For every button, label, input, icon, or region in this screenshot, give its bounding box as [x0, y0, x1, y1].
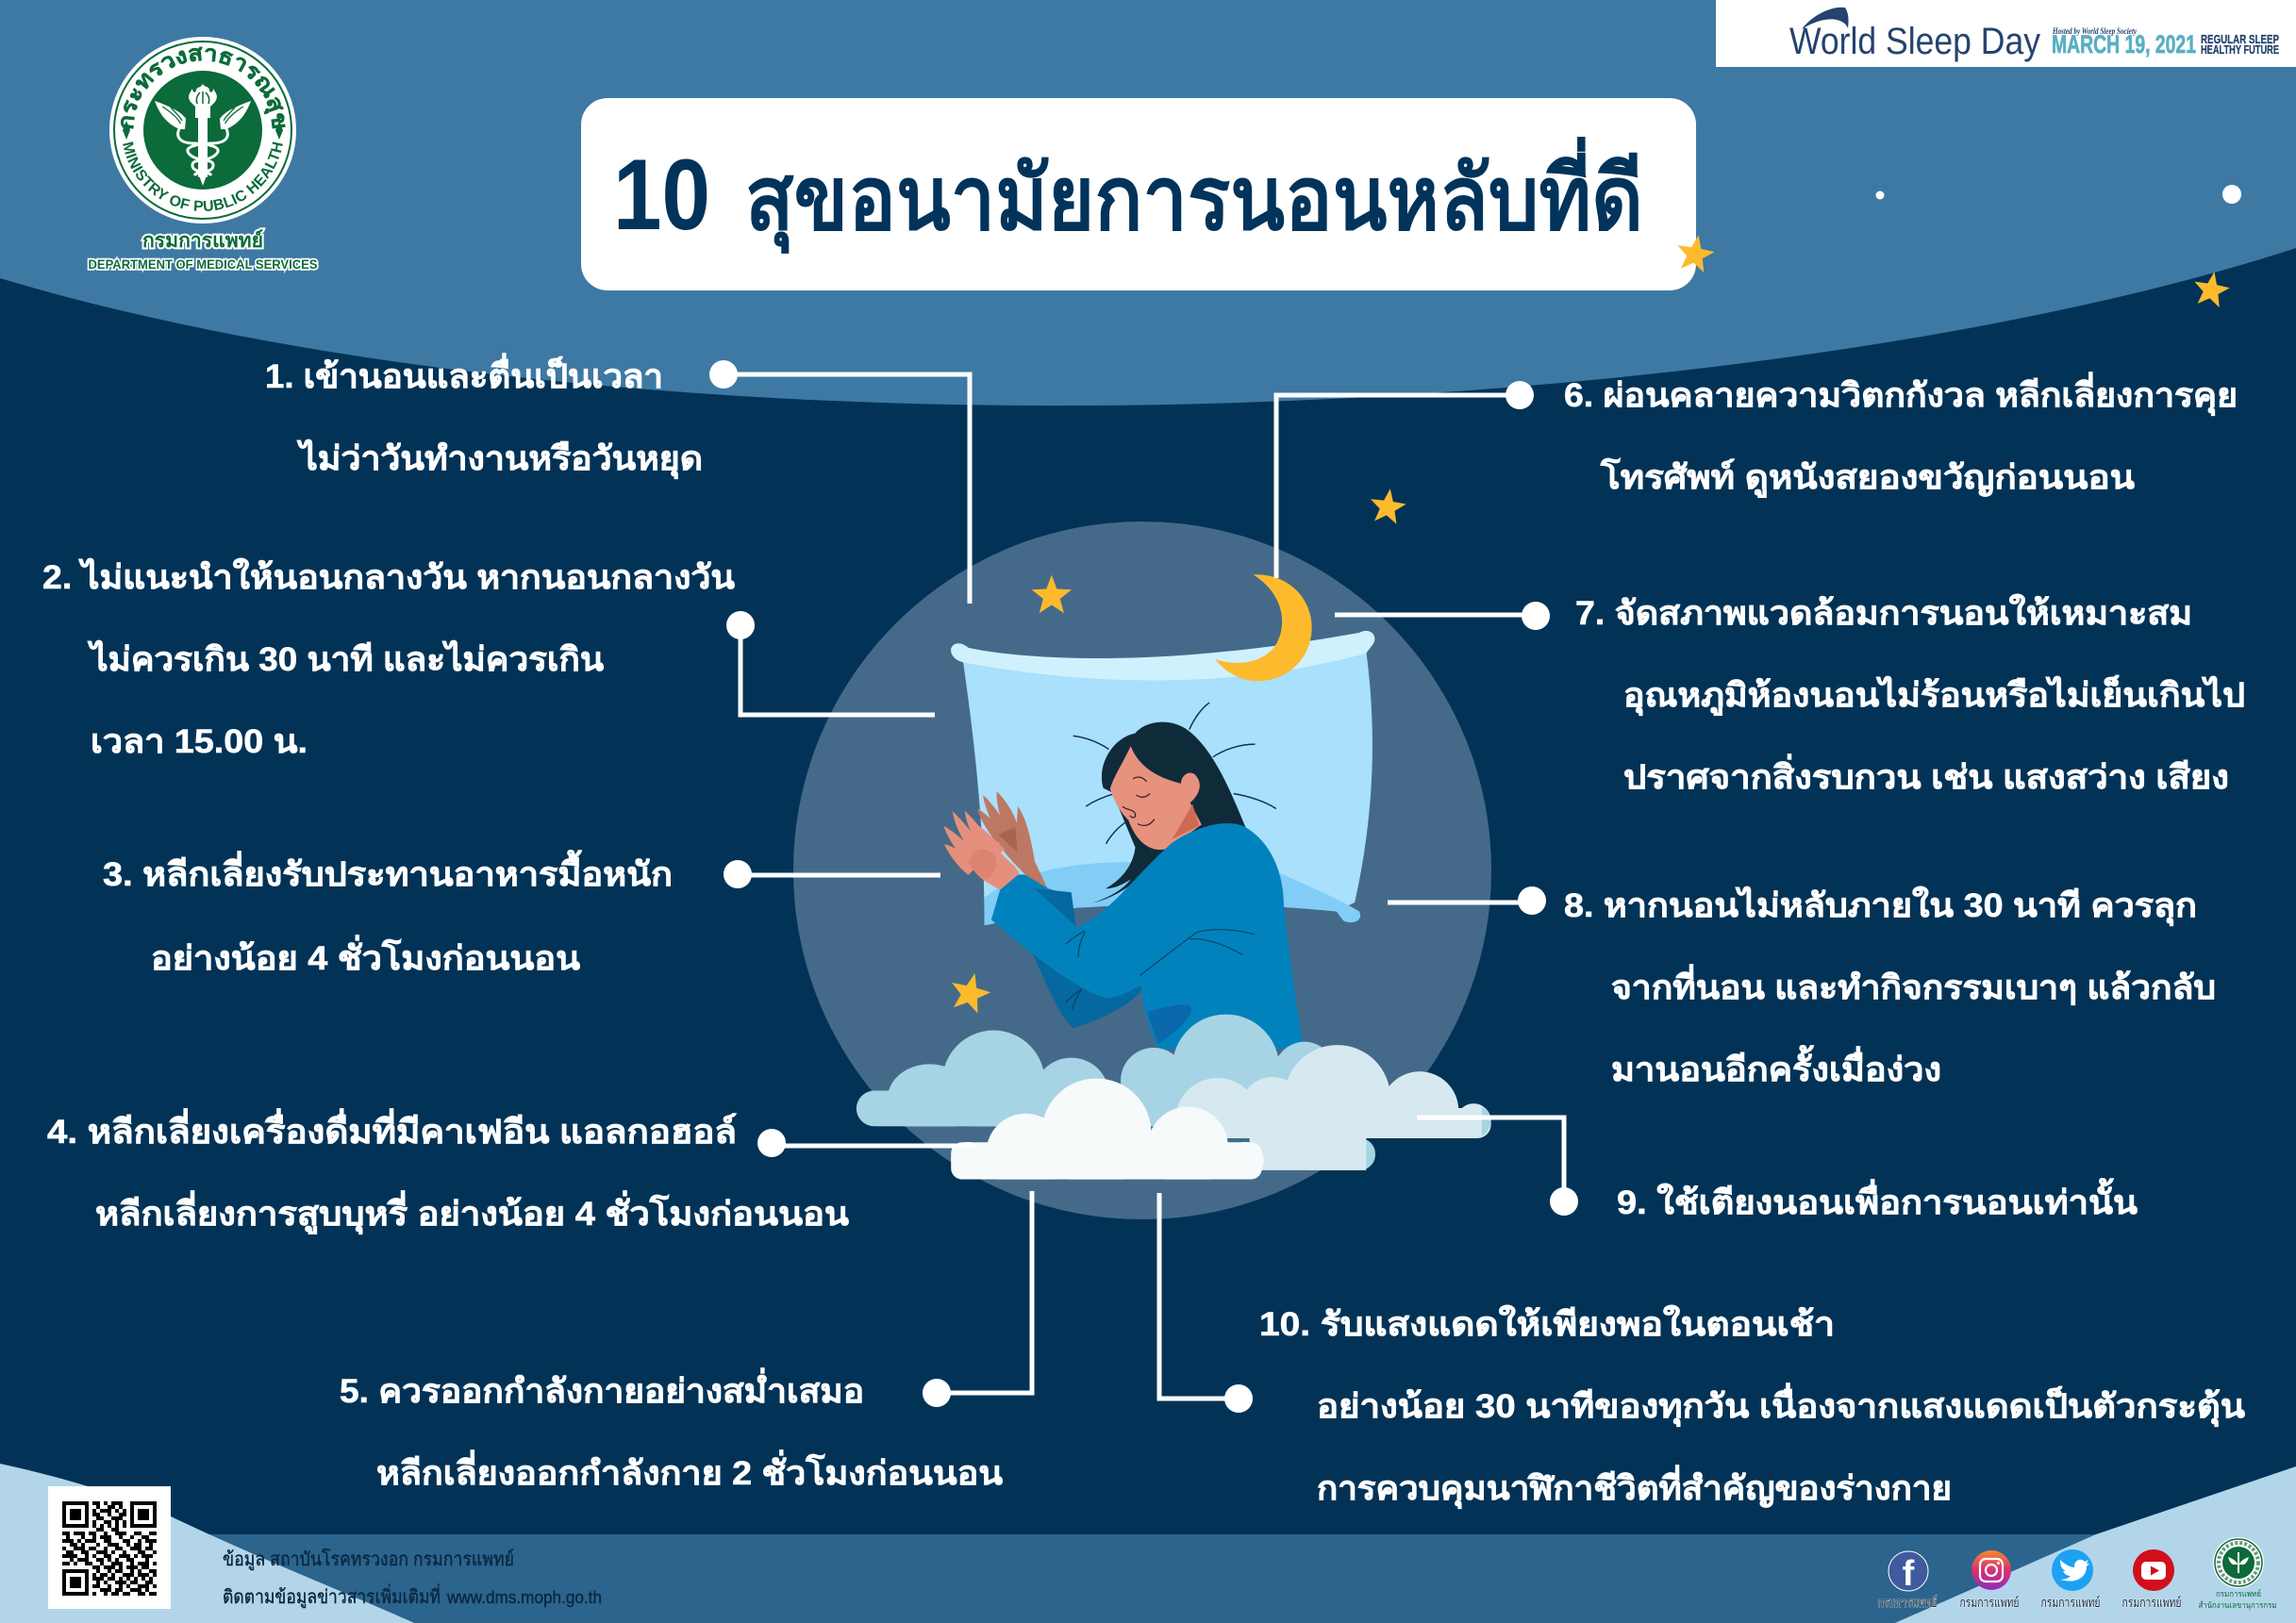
cloud back left [857, 1015, 1337, 1134]
icon: twitter [2052, 1549, 2093, 1591]
host line: Hosted by World Sleep Society [2052, 26, 2138, 36]
star upper [1032, 575, 1072, 613]
item 5: หลีกเลี่ยงออกกำลังกาย 2 ชั่วโมงก่อนนอน [376, 1449, 1003, 1492]
front hand [943, 811, 1020, 889]
item 7: อุณหภูมิห้องนอนไม่ร้อนหรือไม่เย็นเกินไป [1623, 674, 2245, 716]
item 2: 2. ไม่แนะนำให้นอนกลางวัน หากนอนกลางวัน [42, 557, 735, 596]
connector 5 [923, 1191, 1032, 1407]
central circle [793, 522, 1491, 1219]
connector 1 [709, 360, 970, 604]
item 8: จากที่นอน และทำกิจกรรมเบาๆ แล้วกลับ [1611, 964, 2216, 1006]
item 5 [340, 1367, 1003, 1492]
item 10: อย่างน้อย 30 นาทีของทุกวัน เนื่องจากแสงแดดเป็นตัวกระตุ้น [1317, 1383, 2245, 1427]
item 7: ปราศจากสิ่งรบกวน เช่น แสงสว่าง เสียง [1623, 754, 2229, 796]
connector 8 [1388, 886, 1546, 915]
item 4: 4. หลีกเลี่ยงเครื่องดื่มที่มีคาเฟอีน แอลกอฮอล์ [47, 1108, 737, 1151]
background: bottom left light corner [0, 1464, 414, 1623]
social labels: กรมการแพทย์ [2041, 1595, 2100, 1610]
item 6 [1564, 372, 2238, 498]
sweater patch [1147, 1004, 1191, 1044]
ministry logo labels: กรมการแพทย์ [2216, 1588, 2261, 1598]
sweater [991, 823, 1304, 1049]
icon: instagram [1972, 1550, 2011, 1590]
icon: youtube [2133, 1549, 2174, 1591]
item 8: มานอนอีกครั้งเมื่อง่วง [1611, 1045, 1941, 1088]
item 6: 6. ผ่อนคลายความวิตกกังวล หลีกเลี่ยงการคุย [1564, 372, 2238, 416]
World Sleep Day banner [1716, 0, 2296, 67]
social labels [1877, 1595, 2181, 1610]
pillow [951, 631, 1374, 925]
footer link text: ติดตามข้อมูลข่าวสารเพิ่มเติมที่ [223, 1583, 441, 1609]
decorative dots [1875, 185, 2241, 204]
background: top blue curved header [0, 0, 2296, 406]
item 2: ไม่ควรเกิน 30 นาที และไม่ควรเกิน [87, 639, 604, 678]
hair [1091, 722, 1246, 903]
social labels: กรมการแพทย์ [2122, 1595, 2181, 1610]
item 3 [103, 850, 673, 977]
logo caption: department name Thai: กรมการแพทย์ [142, 229, 263, 252]
face lines [1123, 777, 1155, 825]
sweater folds [1066, 930, 1255, 1010]
icon: facebook: f [1903, 1554, 1915, 1594]
connector 4 [757, 1129, 975, 1157]
item 1: ไม่ว่าวันทำงานหรือวันหยุด [296, 439, 703, 479]
illustration: sleeping woman [857, 574, 1491, 1192]
logo: Ministry of Public Health: MINISTRY OF PUBLIC HEALTH [123, 141, 283, 211]
cloud front [951, 1079, 1264, 1180]
item 10: 10. รับแสงแดดให้เพียงพอในตอนเช้า [1259, 1304, 1835, 1343]
back hand [977, 791, 1047, 888]
connector 9 [1417, 1118, 1578, 1216]
item 4 [47, 1108, 849, 1234]
stray hair lines [1073, 703, 1276, 844]
face [1110, 746, 1202, 850]
footer link text [223, 1583, 602, 1609]
connector 6 [1276, 381, 1534, 578]
lower arm [1028, 943, 1144, 1028]
icon: ministry small logo [2213, 1537, 2264, 1588]
item 1: 1. เข้านอนและตื่นเป็นเวลา [265, 353, 663, 395]
item 10 [1259, 1304, 2245, 1509]
connector 7 [1335, 602, 1550, 630]
star lower [946, 969, 994, 1015]
QR code [48, 1486, 171, 1609]
woman [943, 703, 1304, 1049]
item 7 [1575, 593, 2245, 796]
ministry logo labels [2198, 1588, 2277, 1611]
cloud back right [1175, 1045, 1491, 1170]
connector 10 [1159, 1193, 1253, 1413]
item 5: 5. ควรออกกำลังกายอย่างสม่ำเสมอ [340, 1367, 864, 1410]
icon: facebook [1888, 1551, 1928, 1594]
World Sleep Day wordmark: World Sleep Day [1789, 21, 2040, 62]
connector 3 [724, 860, 940, 888]
item 2 [42, 557, 735, 760]
footer source text: ข้อมูล สถาบันโรคทรวงอก กรมการแพทย์ [223, 1548, 514, 1571]
logo: Ministry of Public Health: กระทรวงสาธารณสุข [121, 46, 286, 129]
item 3: 3. หลีกเลี่ยงรับประทานอาหารมื้อหนัก [103, 850, 673, 893]
background: bottom right light corner [1895, 1466, 2296, 1623]
item 8 [1564, 886, 2216, 1088]
title box [581, 98, 1696, 290]
emblem: caduceus [155, 84, 251, 186]
date: MARCH 19, 2021 [2052, 30, 2196, 58]
neck shadow [1172, 804, 1199, 839]
item 4: หลีกเลี่ยงการสูบบุหรี่ อย่างน้อย 4 ชั่วโมงก่อนนอน [95, 1190, 849, 1234]
logo: Ministry of Public Health [109, 37, 296, 224]
ministry logo labels: สำนักงานเลขานุการกรม [2198, 1600, 2277, 1611]
item 10: การควบคุมนาฬิกาชีวิตที่สำคัญของร่างกาย [1317, 1465, 1952, 1509]
item 7: 7. จัดสภาพแวดล้อมการนอนให้เหมาะสม [1575, 593, 2192, 632]
connector 2 [726, 611, 935, 715]
item 1 [265, 353, 703, 479]
item 3: อย่างน้อย 4 ชั่วโมงก่อนนอน [151, 935, 580, 977]
social labels: กรมการแพทย์ [1877, 1595, 1938, 1610]
title text: 10 [613, 138, 710, 251]
star top right of title [1673, 232, 1717, 273]
title text: สุขอนามัยการนอนหลับที่ดี [745, 136, 1643, 254]
star right edge [2190, 269, 2232, 308]
item 2: เวลา 15.00 น. [91, 723, 308, 760]
logo caption: department name English: DEPARTMENT OF MEDICAL SERVICES [89, 257, 317, 272]
item 8: 8. หากนอนไม่หลับภายใน 30 นาที ควรลุก [1564, 886, 2197, 926]
footer link text: www.dms.moph.go.th [446, 1588, 602, 1607]
star mid right [1368, 487, 1408, 525]
wordmark arc [1802, 8, 1849, 29]
moon [1215, 574, 1312, 681]
cuff shade [1035, 888, 1076, 926]
item 6: โทรศัพท์ ดูหนังสยองขวัญก่อนนอน [1600, 457, 2135, 498]
background: footer band [0, 1534, 2296, 1623]
item 9: 9. ใช้เตียงนอนเพื่อการนอนเท่านั้น [1617, 1178, 2138, 1221]
social labels: กรมการแพทย์ [1960, 1595, 2019, 1610]
